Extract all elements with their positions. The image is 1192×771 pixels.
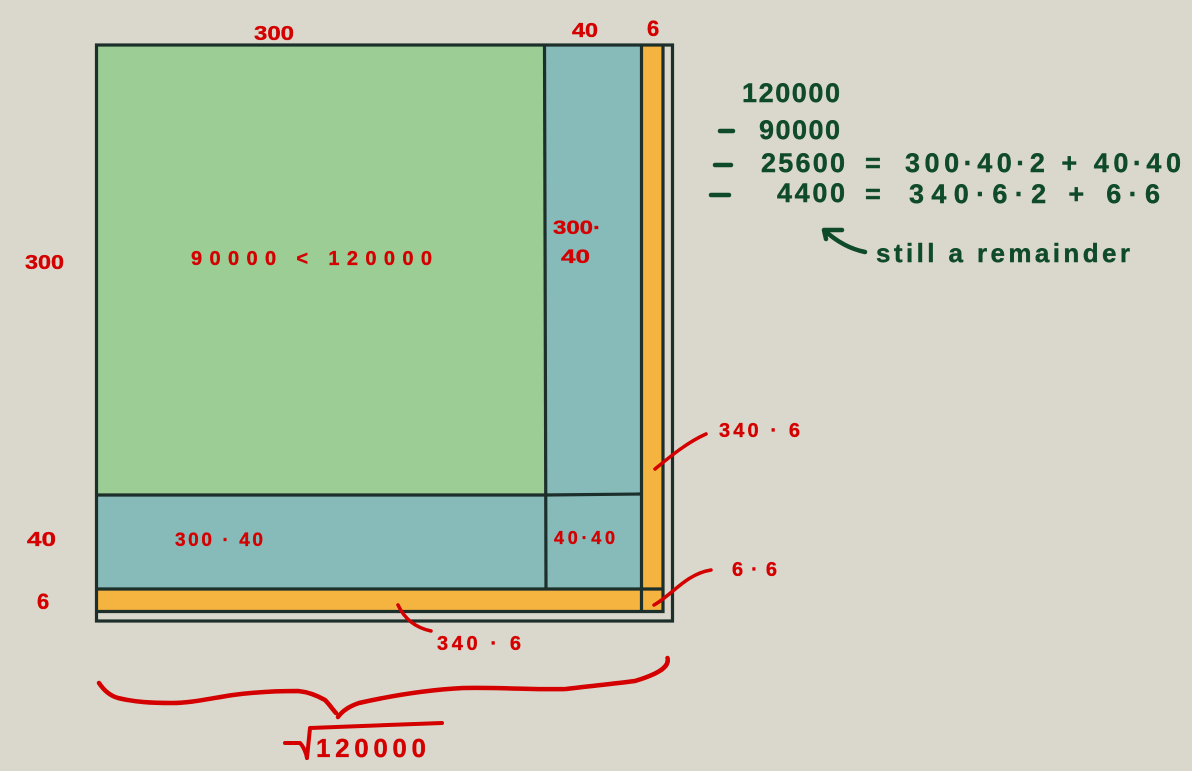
label: 90000 less than 120000: 90000 < 120000 xyxy=(191,248,432,270)
line: minus 25600 equation: = xyxy=(865,148,881,178)
subtraction working xyxy=(711,78,1181,209)
label: 300 times 40 vertical: 300· xyxy=(553,218,601,239)
line: minus 4400 equation: = xyxy=(865,179,881,209)
callout: bottom 340 times 6: 340 · 6 xyxy=(437,633,521,655)
radical sign xyxy=(285,723,442,758)
callout: 6 times 6: 6 · 6 xyxy=(732,559,777,581)
area: 40 by 40 teal square xyxy=(545,494,642,589)
callout: 6 times 6 xyxy=(654,559,777,605)
line: minus 4400 equation: 4400 xyxy=(777,178,845,208)
label: 300 times 40 horizontal: 300 · 40 xyxy=(175,530,263,551)
area: right teal strip xyxy=(545,45,642,494)
callout: right 340 times 6: 340 · 6 xyxy=(719,420,800,442)
note: still a remainder: still a remainder xyxy=(876,238,1130,268)
area: bottom orange strip xyxy=(96,589,641,611)
square root of 120000 xyxy=(285,723,442,763)
line: minus 4400 equation xyxy=(711,178,1160,209)
area labels xyxy=(175,218,615,551)
line: minus 4400 equation: 340·6·2 + 6·6 xyxy=(909,179,1160,209)
line: 120000: 120000 xyxy=(742,78,840,108)
label: 40 times 40: 40·40 xyxy=(554,528,615,548)
area: bottom teal strip xyxy=(96,495,546,589)
line: minus 25600 equation: 25600 xyxy=(761,148,845,178)
grid lines xyxy=(96,45,672,621)
callout: bottom 340 times 6 xyxy=(398,605,521,655)
arrow to remainder xyxy=(824,230,865,252)
callout: right 340 times 6 xyxy=(655,420,800,469)
label: left 6: 6 xyxy=(37,589,49,614)
label: left 300: 300 xyxy=(25,252,64,274)
label: left 40: 40 xyxy=(27,529,56,551)
label: top 300: 300 xyxy=(254,23,294,45)
area: right orange strip xyxy=(641,45,663,589)
area: 6 by 6 orange square xyxy=(641,589,663,611)
label: 40 second line: 40 xyxy=(561,247,590,268)
line: minus 90000 xyxy=(720,115,840,145)
brace under square xyxy=(99,658,668,717)
dimension labels xyxy=(25,16,659,614)
line: minus 25600 equation xyxy=(715,148,1181,178)
label: top 40: 40 xyxy=(572,20,598,42)
area: 300 by 300 green square xyxy=(96,45,545,495)
line: minus 90000: 90000 xyxy=(759,115,840,145)
square diagram xyxy=(96,45,672,621)
radicand: 120000 xyxy=(316,733,426,763)
line: minus 25600 equation: 300·40·2 + 40·40 xyxy=(905,148,1181,178)
label: top 6: 6 xyxy=(647,16,659,41)
